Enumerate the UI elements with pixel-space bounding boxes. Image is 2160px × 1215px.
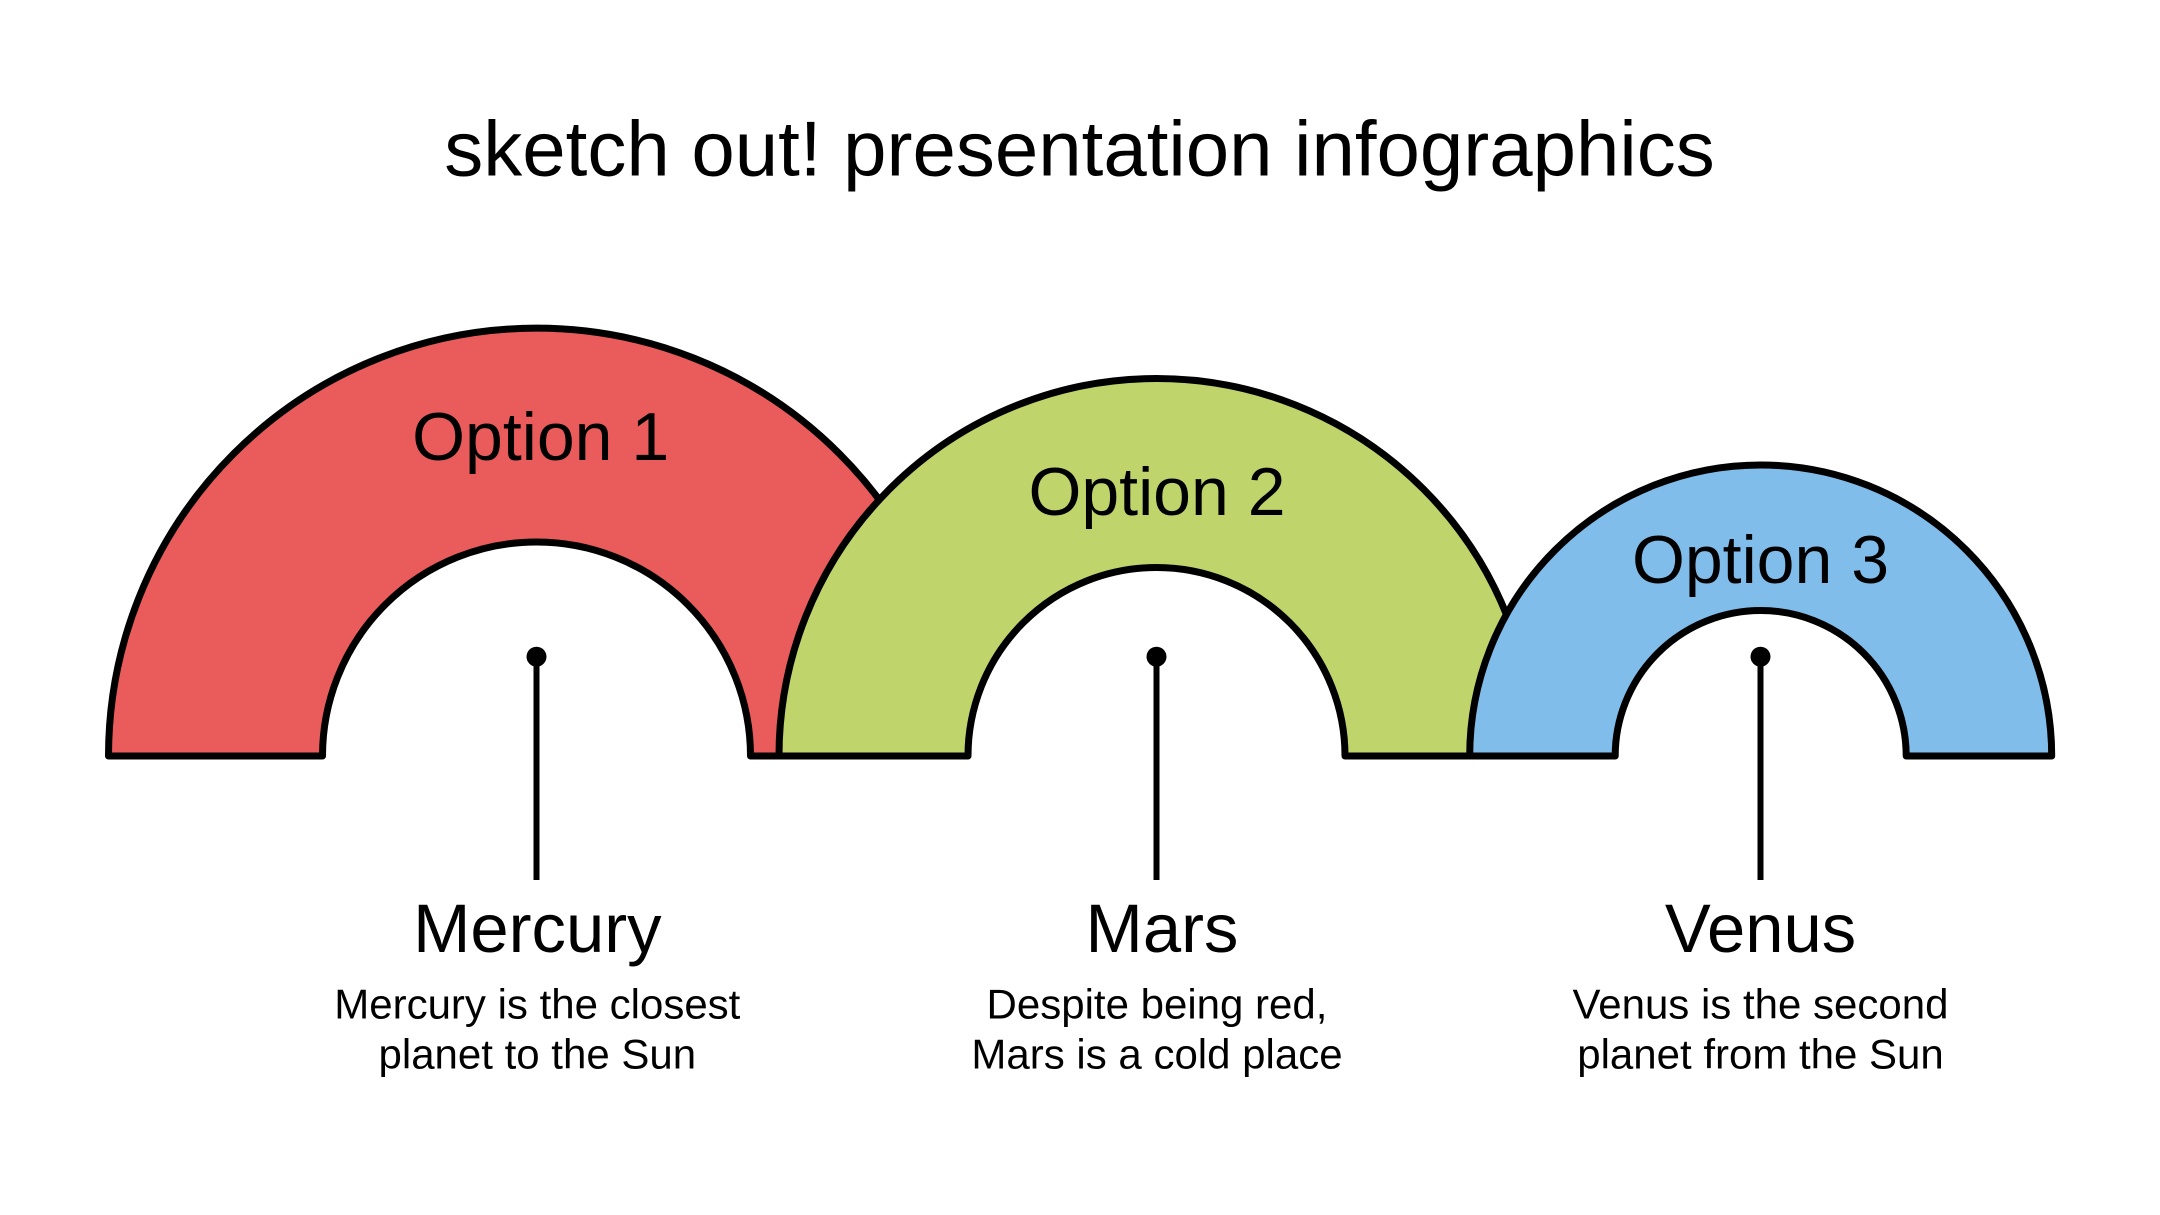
- panel: option 2 arch: [779, 379, 1534, 756]
- text block: Mercury: Mercury is the closest: [334, 980, 741, 1028]
- text block: Mars: Mars: [1086, 890, 1238, 967]
- text block: Mars: Mars is a cold place: [971, 1030, 1343, 1078]
- connector pin: Mars: [1146, 647, 1166, 880]
- text block: Mercury: Mercury: [413, 890, 662, 967]
- text block: Mercury: planet to the Sun: [379, 1030, 696, 1078]
- panel: option 3 arch: [1470, 465, 2052, 756]
- panel: option 3 arch: Option 3: [1632, 522, 1889, 598]
- panel: option 1 arch: [108, 328, 964, 756]
- text block: Mars: Despite being red,: [987, 980, 1327, 1028]
- text block: Venus: Venus is the second: [1573, 980, 1948, 1028]
- panel: option 1 arch: Option 1: [412, 399, 669, 475]
- title: sketch out! presentation infographics: [444, 104, 1715, 192]
- connector pin: Venus: [1750, 647, 1770, 880]
- panel: option 2 arch: Option 2: [1028, 454, 1286, 530]
- text block: Venus: Venus: [1665, 890, 1856, 967]
- text block: Mercury: [334, 890, 741, 1078]
- text block: Mars: [971, 890, 1343, 1078]
- connector pin: Mercury: [526, 647, 546, 880]
- text block: Venus: planet from the Sun: [1577, 1030, 1944, 1078]
- text block: Venus: [1573, 890, 1948, 1078]
